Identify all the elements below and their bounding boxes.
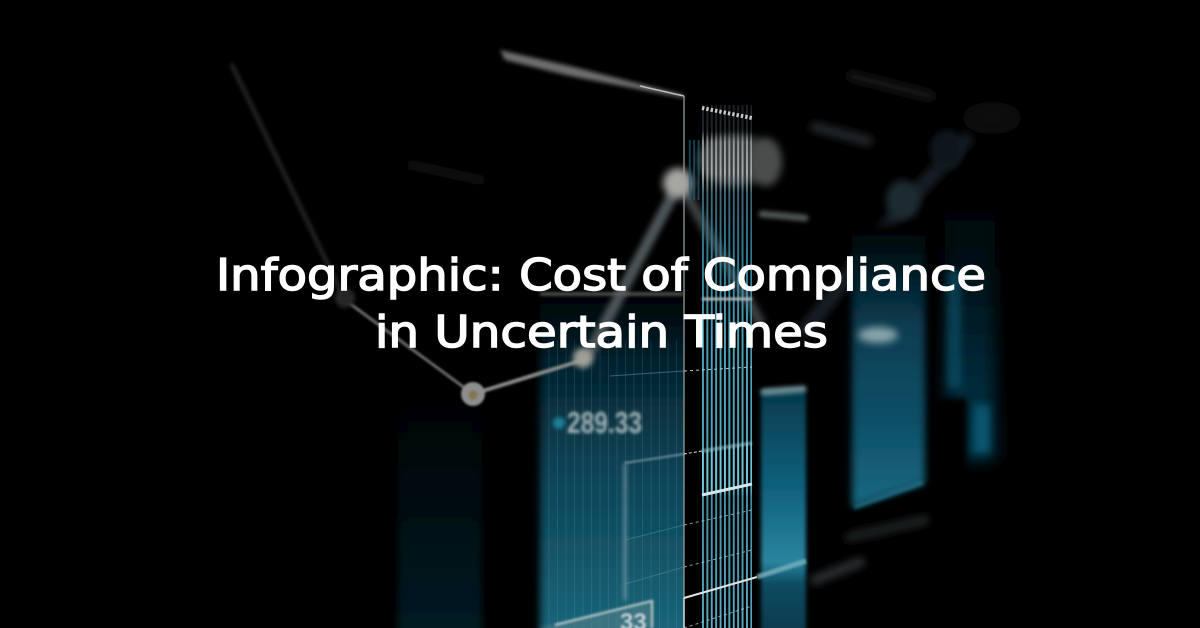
blurred dark block, lower right <box>933 398 967 628</box>
panel outline and grid lines <box>500 50 806 628</box>
panel: left dark teal column <box>398 380 482 628</box>
blurred glow around stripes <box>697 134 782 186</box>
panel: right blue column <box>852 225 925 507</box>
panel: blue column beside stripes <box>761 390 806 628</box>
blurred label on right column <box>858 327 898 343</box>
panel: striped bar column <box>688 105 752 628</box>
chart line: main trend <box>232 65 965 394</box>
title <box>216 250 986 358</box>
bright band in stripes <box>702 443 752 495</box>
title: Infographic: Cost of Compliance <box>216 250 986 301</box>
blurred bars, top right <box>412 76 930 580</box>
blurred chart value: 289.33 <box>567 405 642 440</box>
chart markers <box>335 102 1022 406</box>
panel: main blurred chart column <box>540 290 700 628</box>
bottom value box <box>540 601 652 628</box>
blurred value dot <box>553 417 565 429</box>
panel: right narrow glowing column <box>945 200 995 460</box>
infographic banner <box>220 48 1020 628</box>
title: in Uncertain Times <box>375 307 828 358</box>
